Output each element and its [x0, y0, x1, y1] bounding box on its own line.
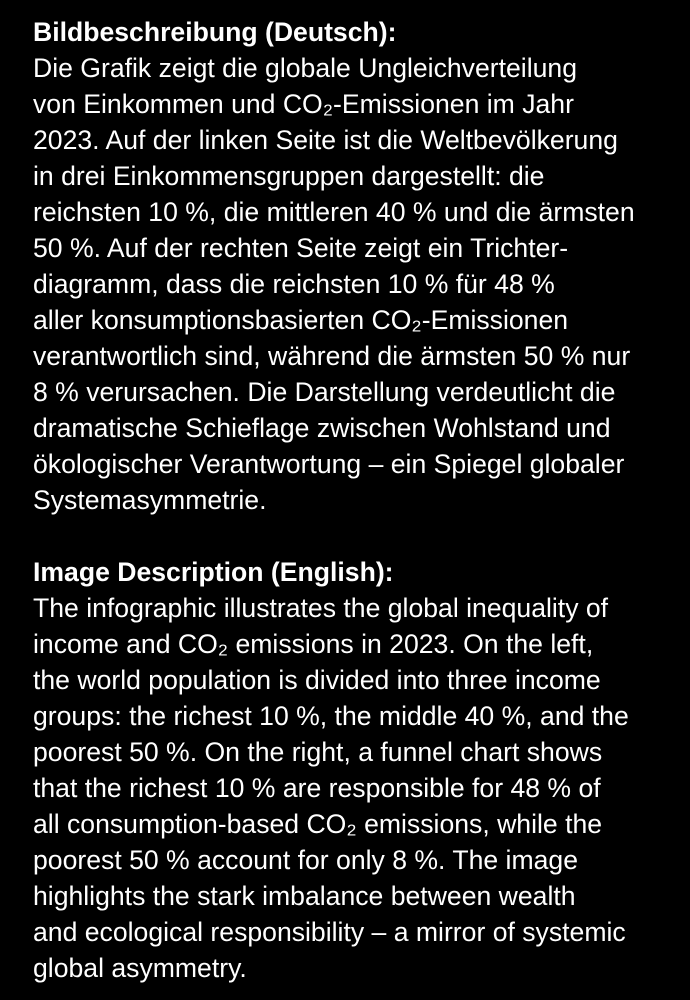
text block: German description: 8 % verursachen. Die Darstellung verdeutlicht die — [33, 377, 615, 407]
text block: German description: Die Grafik zeigt die globale Ungleichverteilung — [33, 53, 577, 83]
text block: English description: poorest 50 % account for only 8 %. The image — [33, 845, 578, 875]
text block: German description: dramatische Schieflage zwischen Wohlstand und — [33, 413, 611, 443]
text block: English description: the world population is divided into three income — [33, 665, 601, 695]
text block: English description: poorest 50 %. On the right, a funnel chart shows — [33, 737, 602, 767]
text block: English description: highlights the stark imbalance between wealth — [33, 881, 576, 911]
text block: English description: all consumption-based CO₂ emissions, while the — [33, 809, 602, 839]
text block: German description: reichsten 10 %, die mittleren 40 % und die ärmsten — [33, 197, 635, 227]
text block: German description: aller konsumptionsbasierten CO₂-Emissionen — [33, 305, 568, 335]
text block: German description: Systemasymmetrie. — [33, 485, 266, 515]
heading: German: Bildbeschreibung (Deutsch): — [33, 17, 396, 47]
text block: English description: The infographic illustrates the global inequality of — [33, 593, 608, 623]
text block: English description: global asymmetry. — [33, 953, 247, 983]
text block: German description: ökologischer Verantwortung – ein Spiegel globaler — [33, 449, 624, 479]
text block: German description: 2023. Auf der linken Seite ist die Weltbevölkerung — [33, 125, 618, 155]
text block: German description: verantwortlich sind, während die ärmsten 50 % nur — [33, 341, 630, 371]
text block: English description: groups: the richest 10 %, the middle 40 %, and the — [33, 701, 629, 731]
text block: English description: that the richest 10 % are responsible for 48 % of — [33, 773, 601, 803]
text block: German description: diagramm, dass die reichsten 10 % für 48 % — [33, 269, 555, 299]
text block: English description — [33, 593, 629, 983]
text block: German description: in drei Einkommensgruppen dargestellt: die — [33, 161, 544, 191]
heading: English: Image Description (English): — [33, 557, 394, 587]
text block: English description: income and CO₂ emissions in 2023. On the left, — [33, 629, 593, 659]
text block: German description: 50 %. Auf der rechten Seite zeigt ein Trichter- — [33, 233, 568, 263]
text block: German description: von Einkommen und CO₂-Emissionen im Jahr — [33, 89, 574, 119]
text block: German description — [33, 53, 635, 515]
text block: English description: and ecological responsibility – a mirror of systemic — [33, 917, 626, 947]
